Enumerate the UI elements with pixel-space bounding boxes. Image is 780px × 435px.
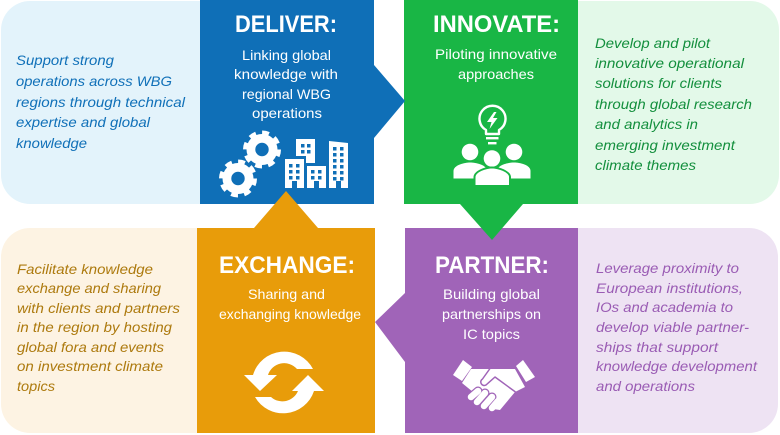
panel: deliver description — [1, 1, 201, 204]
panel: deliver description: knowledge — [16, 136, 87, 151]
panel: exchange block with up arrow — [197, 191, 375, 433]
text: innovate summary: approaches — [458, 67, 534, 82]
text: partner summary: IC topics — [463, 327, 520, 342]
panel: partner description: develop viable partner- — [596, 320, 749, 335]
panel: innovate description: through global research — [595, 97, 752, 112]
text: deliver summary: Linking global — [242, 48, 331, 63]
panel: partner description: ships that support — [596, 340, 719, 355]
icon: circular arrows — [244, 352, 324, 413]
panel: partner description: and operations — [596, 379, 695, 394]
text: innovate summary — [435, 47, 557, 82]
text: exchange summary: exchanging knowledge — [219, 307, 361, 322]
text: partner summary — [442, 287, 541, 342]
panel: deliver block with right arrow — [200, 0, 405, 204]
panel: deliver description: regions through technical — [16, 95, 186, 110]
panel: innovate block with down arrow — [404, 0, 578, 240]
heading: exchange: EXCHANGE: — [219, 252, 355, 279]
panel: exchange description: with clients and partners — [17, 301, 180, 316]
heading: innovate: INNOVATE: — [433, 11, 560, 38]
icon: handshake — [453, 360, 535, 410]
text: deliver summary: regional WBG — [242, 87, 331, 102]
panel: partner description: Leverage proximity to — [596, 261, 739, 276]
panel: innovate description: and analytics in — [595, 117, 698, 132]
heading: deliver: DELIVER: — [235, 11, 337, 38]
panel: innovate description: emerging investment — [595, 138, 736, 153]
panel: partner block with left arrow — [375, 228, 578, 433]
text: exchange summary — [219, 287, 361, 322]
icon: gears and buildings — [221, 132, 348, 196]
text: deliver summary: knowledge with — [234, 67, 338, 82]
panel: exchange description: on investment climate — [17, 359, 163, 374]
panel: innovate description: Develop and pilot — [595, 36, 711, 51]
panel: partner description: IOs and academia to — [596, 300, 733, 315]
text: deliver summary — [234, 48, 338, 121]
panel: innovate description: climate themes — [595, 158, 696, 173]
panel: partner description: European institutions, — [596, 281, 743, 296]
heading: partner: PARTNER: — [435, 252, 549, 279]
panel: exchange description: global fora and events — [17, 340, 164, 355]
panel: exchange description: topics — [17, 379, 55, 394]
panel: partner description — [577, 228, 778, 433]
panel: exchange description: exchange and sharing — [17, 281, 161, 296]
panel: deliver description: Support strong — [16, 53, 114, 68]
text: exchange summary: Sharing and — [248, 287, 325, 302]
panel: exchange description: in the region by hosting — [17, 320, 172, 335]
panel: exchange description: Facilitate knowledge — [17, 262, 153, 277]
icon: lightbulb and people — [454, 106, 530, 187]
text: deliver summary: operations — [252, 106, 322, 121]
panel: exchange description — [1, 228, 198, 433]
panel: innovate description: innovative operational — [595, 56, 745, 71]
panel: innovate description — [577, 1, 779, 204]
panel: deliver description: expertise and global — [16, 115, 151, 130]
panel: innovate description: solutions for clients — [595, 76, 722, 91]
panel: partner description: knowledge development — [596, 359, 758, 374]
text: partner summary: Building global — [443, 287, 540, 302]
panel: deliver description: operations across WBG — [16, 74, 172, 89]
text: partner summary: partnerships on — [442, 307, 541, 322]
text: innovate summary: Piloting innovative — [435, 47, 557, 62]
